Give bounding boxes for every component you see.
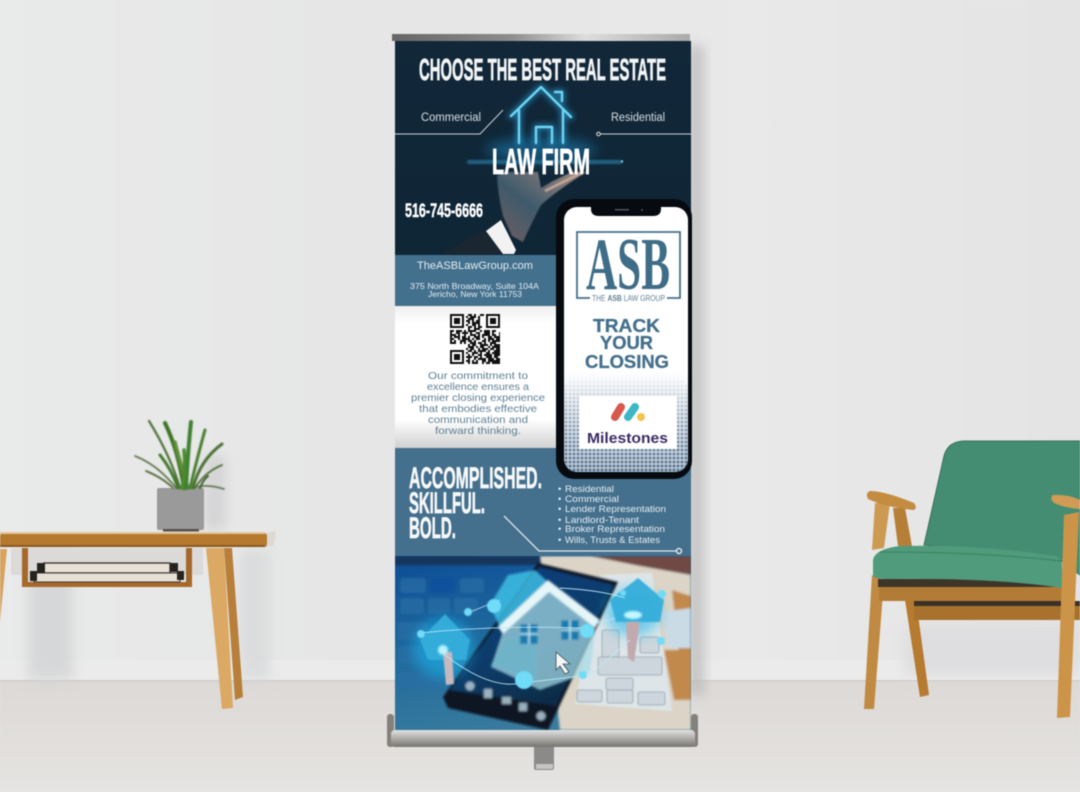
network lines and nodes: [420, 588, 630, 684]
website: TheASBLawGroup.com: [417, 260, 533, 272]
QR code: [450, 315, 500, 363]
services list: Commercial: [565, 494, 619, 505]
services list: Residential: [565, 484, 614, 495]
ASB logo: ASB: [586, 224, 670, 306]
services list: Wills, Trusts & Estates: [565, 535, 660, 546]
chair arms: [867, 491, 1080, 510]
services list: Broker Representation: [565, 524, 665, 535]
address: Jericho, New York 11753: [428, 289, 522, 299]
commitment text: excellence ensures a: [427, 381, 529, 393]
chair seat cushion: [873, 546, 1062, 588]
icon: glowing house: [486, 87, 596, 162]
shelf under table: [11, 548, 203, 587]
connector line: [504, 516, 682, 554]
banner shadow: [688, 45, 704, 695]
hand holding house: [442, 172, 586, 254]
services list: Lender Representation: [565, 504, 666, 515]
ASB logo: THE ASB LAW GROUP: [592, 293, 665, 303]
top rail: [392, 34, 690, 41]
Milestones wordmark: Milestones: [587, 430, 668, 447]
chair front leg left: [864, 575, 884, 709]
chair back: [924, 441, 1080, 575]
heading: track your closing: [585, 316, 669, 372]
heading: track your closing: YOUR: [600, 333, 653, 353]
icon: left house key: [413, 614, 473, 685]
table top: [0, 531, 276, 547]
label: Commercial: Commercial: [421, 112, 481, 124]
chair front leg right: [1057, 512, 1079, 718]
icon: central translucent house: [490, 570, 600, 690]
commitment text: Our commitment to: [428, 370, 528, 382]
chair rear legs and arm posts: [872, 503, 929, 697]
services list: •: [558, 515, 561, 526]
bottom base: [387, 714, 698, 770]
heading: accomplished skillful bold: ACCOMPLISHED.: [409, 462, 542, 495]
commitment text: communication and: [428, 414, 528, 426]
chair seat rails: [878, 579, 1080, 620]
heading: track your closing: TRACK: [593, 316, 660, 336]
services list: [558, 484, 666, 546]
panel: website and address: [395, 255, 556, 306]
address: [410, 281, 539, 299]
armchair: [864, 441, 1080, 718]
services list: •: [558, 484, 561, 495]
heading: LAW FIRM: LAW FIRM: [492, 141, 590, 182]
roll-up banner: [387, 34, 698, 770]
panel: services: [395, 448, 691, 556]
Milestones logo card: [579, 396, 677, 449]
table with plant: [0, 421, 276, 709]
icon: potted plant: [135, 421, 224, 532]
commitment text: [411, 370, 545, 437]
label: Residential: Residential: [611, 112, 665, 124]
address: 375 North Broadway, Suite 104A: [410, 281, 539, 291]
services list: •: [558, 504, 561, 515]
phone mockup: [556, 199, 692, 479]
services list: •: [558, 524, 561, 535]
panel: navy hero: [395, 41, 691, 255]
ASB logo: [577, 224, 680, 306]
heading: accomplished skillful bold: [409, 462, 542, 545]
white keyboard: [575, 573, 672, 711]
phone number: 516-745-6666: [405, 201, 483, 222]
blue keyboard keys: [399, 578, 484, 638]
services list: Landlord-Tenant: [565, 515, 639, 526]
heading: accomplished skillful bold: SKILLFUL.: [409, 487, 485, 520]
services list: •: [558, 535, 561, 546]
sleeve: [444, 229, 502, 254]
commitment text: premier closing experience: [411, 392, 545, 404]
table legs: [0, 548, 243, 709]
panel: navy hero: CHOOSE THE BEST REAL ESTATE: [419, 52, 666, 87]
services list: •: [558, 494, 561, 505]
commitment text: that embodies effective: [419, 403, 537, 415]
panel: photo of phone and keyboard: [395, 556, 691, 730]
icon: right house key: [605, 578, 664, 662]
desk and books: [540, 556, 691, 730]
label: Residential: [597, 112, 691, 136]
cuff: [486, 220, 516, 254]
phone on desk: [443, 563, 618, 730]
glow line: [467, 160, 623, 164]
label: Commercial: [395, 110, 503, 134]
Milestones icon: [615, 407, 641, 417]
commitment text: forward thinking.: [435, 425, 521, 437]
heading: track your closing: CLOSING: [585, 352, 669, 372]
heading: accomplished skillful bold: BOLD.: [409, 512, 456, 545]
halftone pattern: [564, 378, 688, 472]
panel: commitment: [395, 306, 557, 448]
hand: [497, 172, 586, 242]
phone notch: [591, 206, 661, 216]
icon: cursor arrow: [556, 652, 570, 674]
